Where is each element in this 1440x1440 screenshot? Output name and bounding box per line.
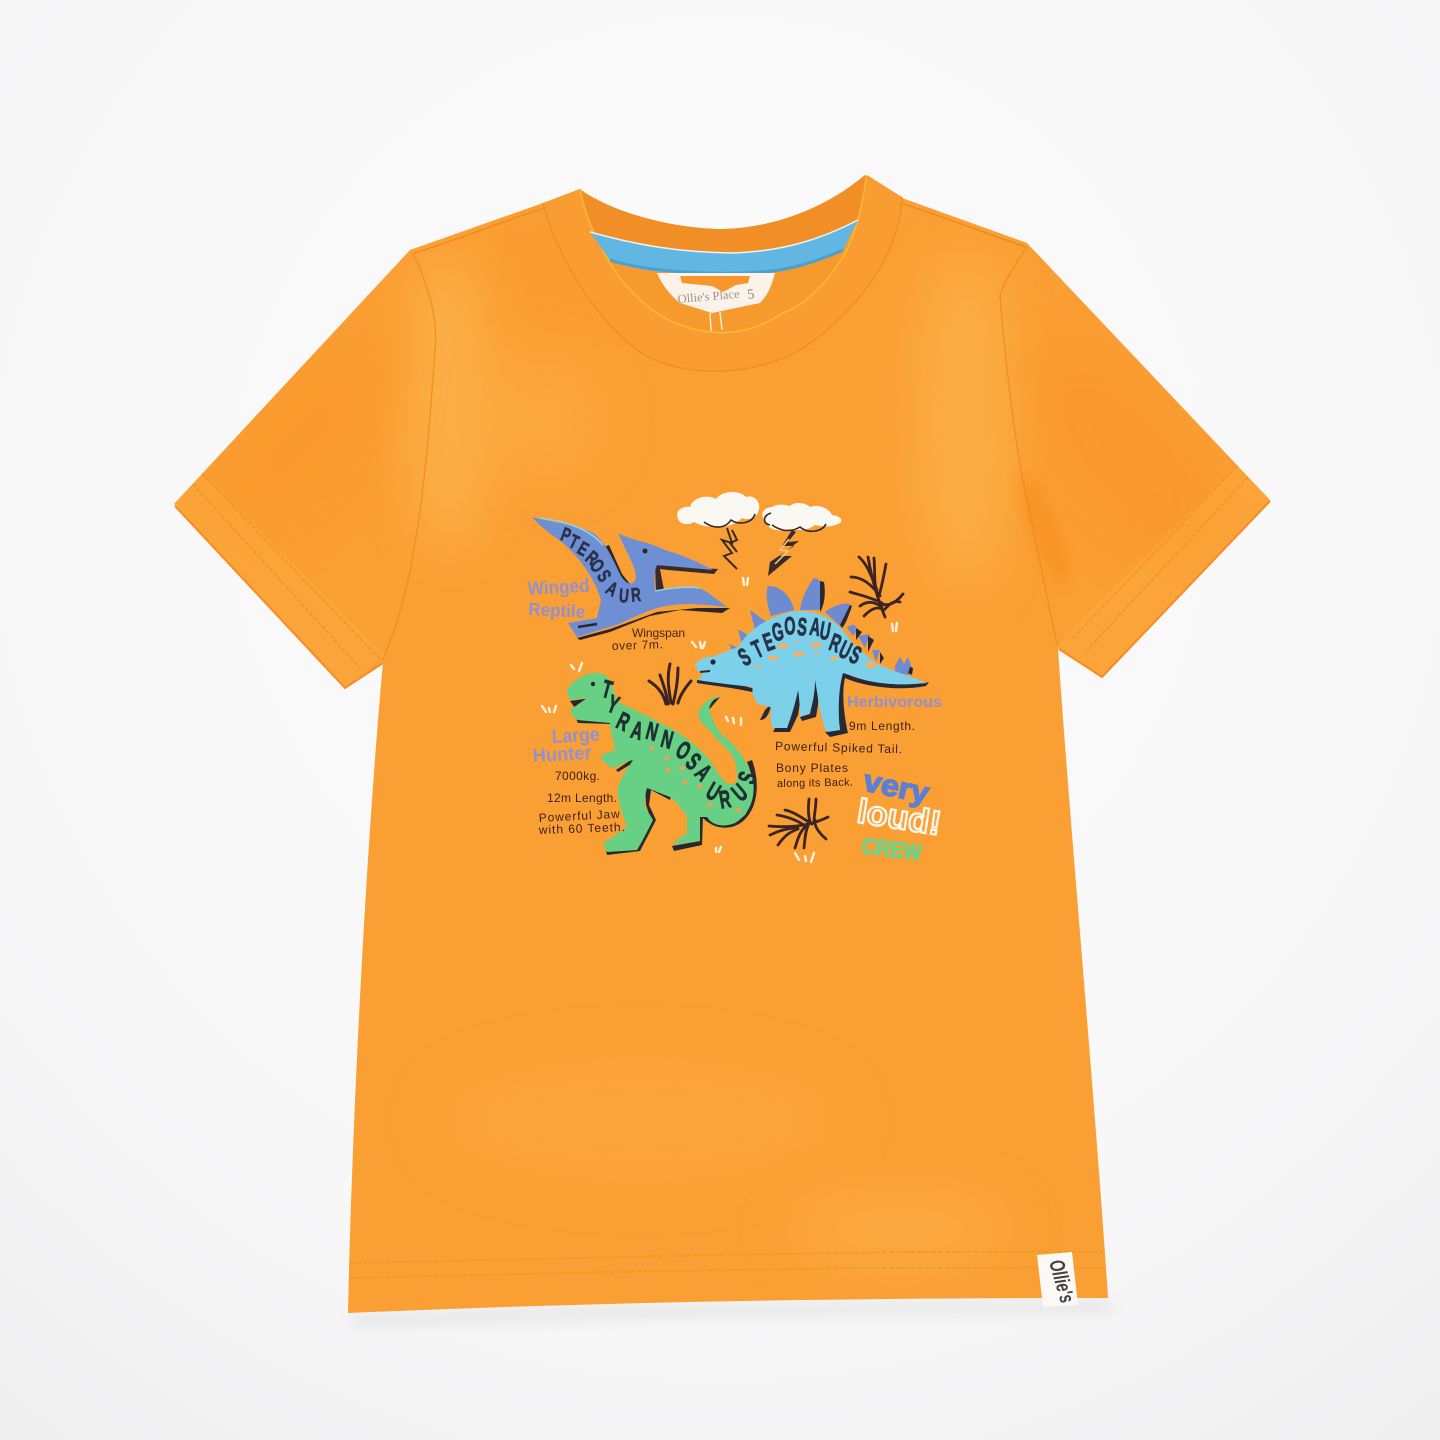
- text: tyrannosaurus facts: 7000kg.: [555, 769, 600, 783]
- pterosaur: [532, 517, 730, 640]
- name: PTEROSAUR: R: [581, 546, 603, 570]
- name: STEGOSAURUS: G: [770, 619, 786, 647]
- neck label: [657, 273, 775, 331]
- side tag: [1037, 1252, 1078, 1307]
- text: pterosaur facts: Winged: [527, 576, 590, 600]
- name: TYRANNOSAURUS: U: [727, 779, 753, 807]
- body: [532, 517, 727, 637]
- name: PTEROSAUR: R: [630, 584, 642, 606]
- palm leaf lower: [769, 799, 828, 848]
- very loud crew slogan: CREW: [860, 833, 923, 865]
- name: PTEROSAUR: A: [602, 577, 622, 601]
- text: pterosaur facts: [527, 576, 685, 653]
- text: tyrannosaurus facts: 12m Length.: [547, 791, 617, 805]
- hem stitching: [350, 1252, 1104, 1278]
- name: PTEROSAUR: U: [618, 585, 630, 607]
- name: TYRANNOSAURUS: R: [612, 707, 634, 737]
- t-shirt: [174, 175, 1270, 1326]
- name: PTEROSAUR: [558, 523, 642, 607]
- fabric folds: [174, 230, 1270, 1270]
- body: [695, 611, 927, 732]
- neck label: Ollie's Place: [677, 287, 740, 306]
- name: TYRANNOSAURUS: R: [717, 785, 733, 815]
- collar band: [543, 175, 902, 371]
- stegosaurus: [695, 578, 929, 737]
- shirt soft shadow: [352, 1302, 1112, 1326]
- name: PTEROSAUR: T: [566, 530, 583, 554]
- text: tyrannosaurus facts: [532, 725, 625, 837]
- name: TYRANNOSAURUS: T: [599, 675, 615, 705]
- name: STEGOSAURUS: [734, 613, 865, 672]
- name: PTEROSAUR: P: [558, 523, 574, 547]
- body: [567, 673, 754, 852]
- name: TYRANNOSAURUS: Y: [603, 690, 623, 720]
- very loud crew slogan: [855, 765, 944, 865]
- inside of the neck: [580, 175, 865, 333]
- name: STEGOSAURUS: E: [760, 629, 778, 657]
- shadow: [570, 697, 757, 855]
- text: stegosaurus facts: Herbivorous: [847, 694, 942, 711]
- text: stegosaurus facts: 9m Length.: [849, 719, 915, 733]
- name: TYRANNOSAURUS: S: [733, 768, 763, 788]
- text: stegosaurus facts: [775, 694, 942, 790]
- shadow: [577, 608, 730, 640]
- shirt body: [174, 175, 1270, 1313]
- name: STEGOSAURUS: O: [784, 613, 796, 641]
- blue neck tape: [590, 220, 858, 272]
- name: PTEROSAUR: O: [585, 555, 609, 577]
- text: pterosaur facts: Wingspan: [632, 626, 685, 640]
- print artwork: [527, 492, 944, 865]
- text: stegosaurus facts: Bony Plates: [776, 761, 848, 775]
- shadow: [697, 672, 929, 737]
- text: stegosaurus facts: Powerful Spiked Tail.: [775, 739, 902, 756]
- side tag: Ollie's: [1044, 1257, 1078, 1306]
- name: TYRANNOSAURUS: N: [643, 717, 661, 747]
- very loud crew slogan: loud!: [855, 792, 944, 843]
- name: STEGOSAURUS: U: [818, 618, 832, 646]
- text: pterosaur facts: Reptile: [528, 599, 586, 622]
- name: TYRANNOSAURUS: A: [689, 759, 717, 787]
- sleeve stitching: [193, 466, 1248, 668]
- name: STEGOSAURUS: A: [808, 614, 822, 642]
- clouds and lightning: [677, 492, 841, 576]
- palm leaf right: [850, 557, 903, 617]
- plates: [729, 578, 880, 662]
- armhole seams: [383, 204, 1057, 660]
- name: TYRANNOSAURUS: U: [701, 777, 725, 807]
- name: STEGOSAURUS: S: [845, 642, 865, 670]
- text: tyrannosaurus facts: Hunter: [532, 743, 593, 767]
- name: STEGOSAURUS: R: [826, 630, 845, 659]
- palm leaves and grass: [649, 557, 903, 848]
- name: STEGOSAURUS: U: [835, 637, 855, 665]
- text: tyrannosaurus facts: with 60 Teeth.: [538, 820, 625, 837]
- name: STEGOSAURUS: T: [748, 636, 768, 664]
- name: TYRANNOSAURUS: S: [680, 748, 706, 776]
- text: pterosaur facts: over 7m.: [612, 637, 663, 653]
- sleeve hem bands: [174, 474, 385, 688]
- text: stegosaurus facts: along its Back.: [777, 777, 853, 790]
- name: PTEROSAUR: S: [592, 566, 616, 586]
- grass: [649, 664, 691, 704]
- name: TYRANNOSAURUS: O: [671, 736, 695, 766]
- name: TYRANNOSAURUS: N: [658, 725, 676, 755]
- text: tyrannosaurus facts: Large: [551, 725, 600, 748]
- very loud crew slogan: very: [861, 765, 932, 811]
- white ticks: [542, 578, 897, 862]
- name: TYRANNOSAURUS: A: [628, 716, 646, 746]
- name: PTEROSAUR: E: [574, 537, 592, 561]
- neck label: 5: [746, 287, 755, 303]
- sleeve hem edges: [175, 501, 1270, 688]
- tyrannosaurus: [567, 673, 763, 855]
- name: STEGOSAURUS: S: [796, 614, 808, 642]
- name: STEGOSAURUS: S: [734, 644, 756, 672]
- text: tyrannosaurus facts: Powerful Jaw: [538, 807, 620, 825]
- name: TYRANNOSAURUS: [599, 675, 763, 815]
